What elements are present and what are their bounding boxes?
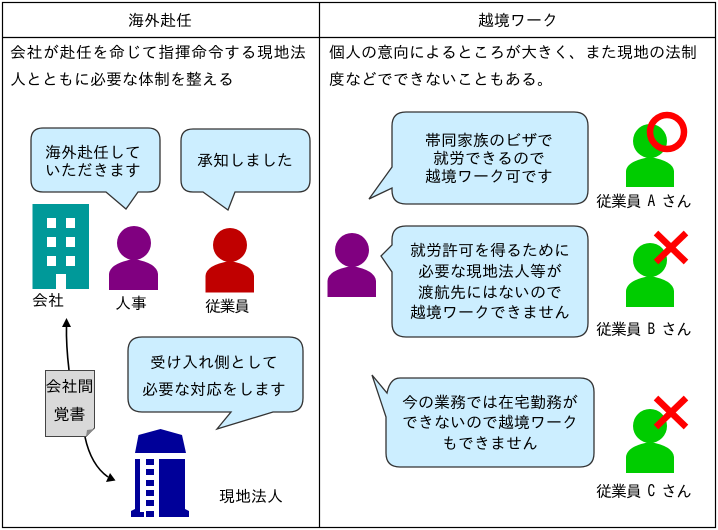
text block: cross-border work description: 度などでできないこともある。 [329, 71, 553, 87]
speech bubble: employee B answer: 必要な現地法人等が [418, 263, 562, 279]
icon: employee person [206, 228, 254, 292]
text block: overseas assignment description: 会社が赴任を命じて指揮命令する現地法 [10, 44, 306, 60]
speech bubble: HR request [31, 128, 160, 209]
document: inter-company memorandum: 覚書 [54, 406, 86, 422]
label: employee C: 従業員 C さん [596, 483, 692, 499]
speech bubble: employee C answer: もできません [442, 435, 538, 451]
speech bubble: HR request: 海外赴任して [45, 144, 141, 160]
speech bubble: employee C answer: できないので越境ワーク [402, 414, 578, 430]
label: employee A: 従業員 A さん [596, 193, 692, 209]
text block: overseas assignment description [10, 44, 306, 87]
label: employee B: 従業員 B さん [596, 321, 692, 337]
speech bubble: employee B answer: 渡航先にはないので [418, 284, 562, 300]
text block: cross-border work description: 個人の意向によるところが大きく、また現地の法制 [329, 44, 697, 60]
label: local entity: 現地法人 [219, 488, 283, 504]
speech bubble: employee A answer: 帯同家族のビザで [425, 132, 553, 148]
speech bubble: employee B answer: 就労許可を得るために [410, 242, 570, 258]
label: employee: 従業員 [205, 298, 250, 314]
document: inter-company memorandum: 会社間 [46, 378, 94, 394]
speech bubble: local entity [128, 337, 303, 429]
employee A with circle mark [626, 115, 684, 187]
speech bubble: local entity: 受け入れ側として [150, 354, 278, 370]
speech bubble: HR request: いただきます [45, 162, 141, 178]
speech bubble: employee A answer: 越境ワーク可です [425, 168, 553, 184]
arrow: memorandum to local entity [85, 437, 116, 482]
label: HR: 人事 [115, 295, 147, 311]
icon: HR person [109, 226, 158, 290]
icon: local entity tower [131, 429, 189, 517]
label: company: 会社 [32, 292, 64, 308]
employee C with cross mark [626, 398, 686, 473]
heading: cross-border work: 越境ワーク [478, 12, 558, 28]
speech bubble: employee B answer [381, 226, 588, 337]
speech bubble: local entity: 必要な対応をします [142, 381, 286, 397]
document: inter-company memorandum [46, 370, 94, 436]
speech bubble: employee A answer [369, 112, 588, 204]
speech bubble: employee C answer [372, 375, 594, 467]
icon: company building [32, 204, 89, 289]
speech bubble: employee reply: 承知しました [197, 152, 293, 168]
text block: overseas assignment description: 人とともに必要な体制を整える [10, 71, 234, 87]
speech bubble: employee A answer: 就労できるので [433, 150, 545, 166]
speech bubble: employee B answer: 越境ワークできません [410, 304, 570, 320]
speech bubble: employee C answer: 今の業務では在宅勤務が [402, 394, 578, 410]
employee B with cross mark [626, 233, 686, 307]
heading: overseas assignment: 海外赴任 [128, 12, 192, 28]
text block: cross-border work description [329, 44, 697, 87]
speech bubble: employee reply [181, 129, 310, 210]
arrow: memorandum to company [62, 318, 71, 370]
icon: purple person on the right [328, 233, 376, 297]
